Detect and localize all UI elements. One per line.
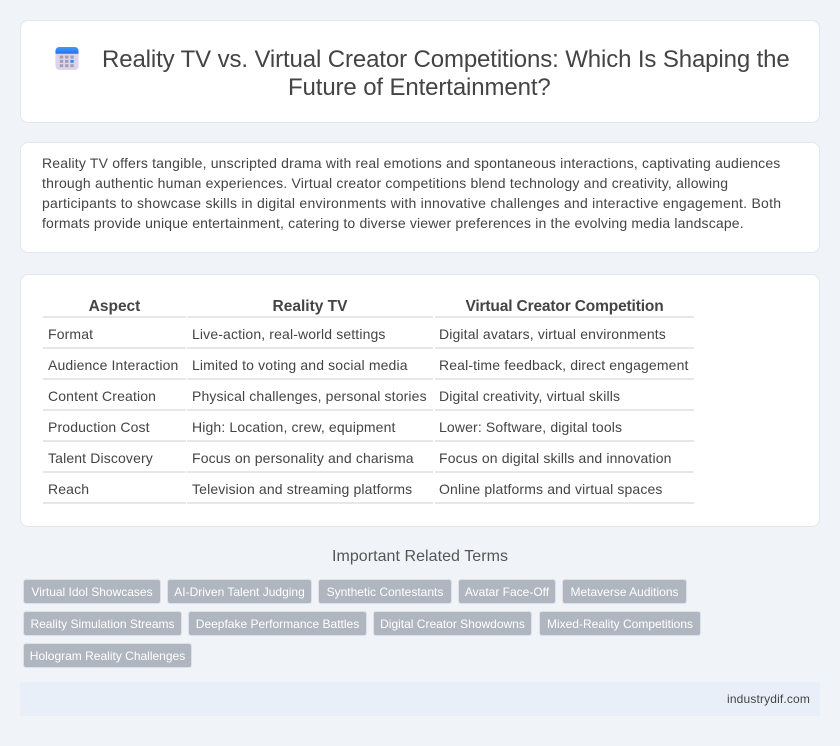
related terms tags bbox=[23, 579, 701, 668]
tag bbox=[23, 611, 182, 636]
tag: Metaverse Auditions bbox=[570, 585, 679, 599]
tag bbox=[167, 579, 312, 604]
footer bar bbox=[20, 682, 820, 716]
row: format bbox=[43, 326, 694, 349]
row: reach: Reach bbox=[48, 481, 89, 497]
panel: intro bbox=[20, 142, 820, 253]
tag: Synthetic Contestants bbox=[327, 585, 443, 599]
title: Future of Entertainment? bbox=[288, 74, 551, 101]
row: audience interaction: Audience Interaction bbox=[48, 357, 178, 373]
row: content creation: Digital creativity, virtual skills bbox=[439, 388, 620, 404]
row: talent discovery bbox=[43, 450, 694, 473]
tag: Hologram Reality Challenges bbox=[30, 649, 185, 663]
row: production cost: Lower: Software, digital tools bbox=[439, 419, 622, 435]
row: talent discovery: Talent Discovery bbox=[48, 450, 153, 466]
table header: Reality TV bbox=[273, 298, 347, 315]
row: reach: Television and streaming platforms bbox=[192, 481, 412, 497]
intro text: through authentic human experiences. Virtual creator competitions blend technology and creativity, allowing bbox=[42, 175, 728, 191]
row: talent discovery: Focus on personality and charisma bbox=[192, 450, 414, 466]
tag bbox=[318, 579, 452, 604]
row: production cost bbox=[43, 419, 694, 442]
tag: Virtual Idol Showcases bbox=[31, 585, 153, 599]
footer site name: industrydif.com bbox=[727, 692, 810, 706]
row: audience interaction bbox=[43, 357, 694, 380]
row: reach: Online platforms and virtual spaces bbox=[439, 481, 663, 497]
panel: comparison table bbox=[20, 274, 820, 527]
tag: AI-Driven Talent Judging bbox=[174, 585, 305, 599]
row: content creation bbox=[43, 388, 694, 411]
icon: calendar bbox=[55, 47, 79, 70]
intro text: Reality TV offers tangible, unscripted drama with real emotions and spontaneous interactions, captivating audiences bbox=[42, 155, 780, 171]
row: production cost: Production Cost bbox=[48, 419, 150, 435]
tag: Digital Creator Showdowns bbox=[380, 617, 525, 631]
row: production cost: High: Location, crew, equipment bbox=[192, 419, 396, 435]
row: audience interaction: Limited to voting and social media bbox=[192, 357, 408, 373]
tag: Mixed-Reality Competitions bbox=[547, 617, 693, 631]
intro text: participants to showcase skills in digital environments with innovative challenges and interactive engagement. Both bbox=[42, 195, 781, 211]
table header: Virtual Creator Competition bbox=[465, 298, 664, 315]
row: format: Digital avatars, virtual environments bbox=[439, 326, 666, 342]
related terms heading: Important Related Terms bbox=[332, 548, 508, 565]
tag bbox=[23, 643, 192, 668]
title: Reality TV vs. Virtual Creator Competitions: Which Is Shaping the bbox=[102, 46, 790, 73]
header panel bbox=[20, 20, 820, 123]
row: audience interaction: Real-time feedback, direct engagement bbox=[439, 357, 689, 373]
tag: Reality Simulation Streams bbox=[30, 617, 175, 631]
row: talent discovery: Focus on digital skills and innovation bbox=[439, 450, 672, 466]
comparison table bbox=[43, 298, 694, 504]
table header: Aspect bbox=[89, 298, 140, 315]
tag bbox=[188, 611, 367, 636]
tag bbox=[458, 579, 556, 604]
row: content creation: Content Creation bbox=[48, 388, 156, 404]
row: reach bbox=[43, 481, 694, 504]
row: format: Live-action, real-world settings bbox=[192, 326, 386, 342]
tag bbox=[373, 611, 532, 636]
intro text: formats provide unique entertainment, catering to diverse viewer preferences in the evolving media landscape. bbox=[42, 215, 744, 231]
tag bbox=[562, 579, 687, 604]
row: format: Format bbox=[48, 326, 93, 342]
title bbox=[102, 46, 790, 101]
row: content creation: Physical challenges, personal stories bbox=[192, 388, 427, 404]
tag bbox=[23, 579, 161, 604]
tag: Avatar Face-Off bbox=[465, 585, 549, 599]
table header bbox=[43, 298, 694, 318]
tag: Deepfake Performance Battles bbox=[196, 617, 359, 631]
tag bbox=[539, 611, 701, 636]
intro text bbox=[42, 155, 781, 231]
